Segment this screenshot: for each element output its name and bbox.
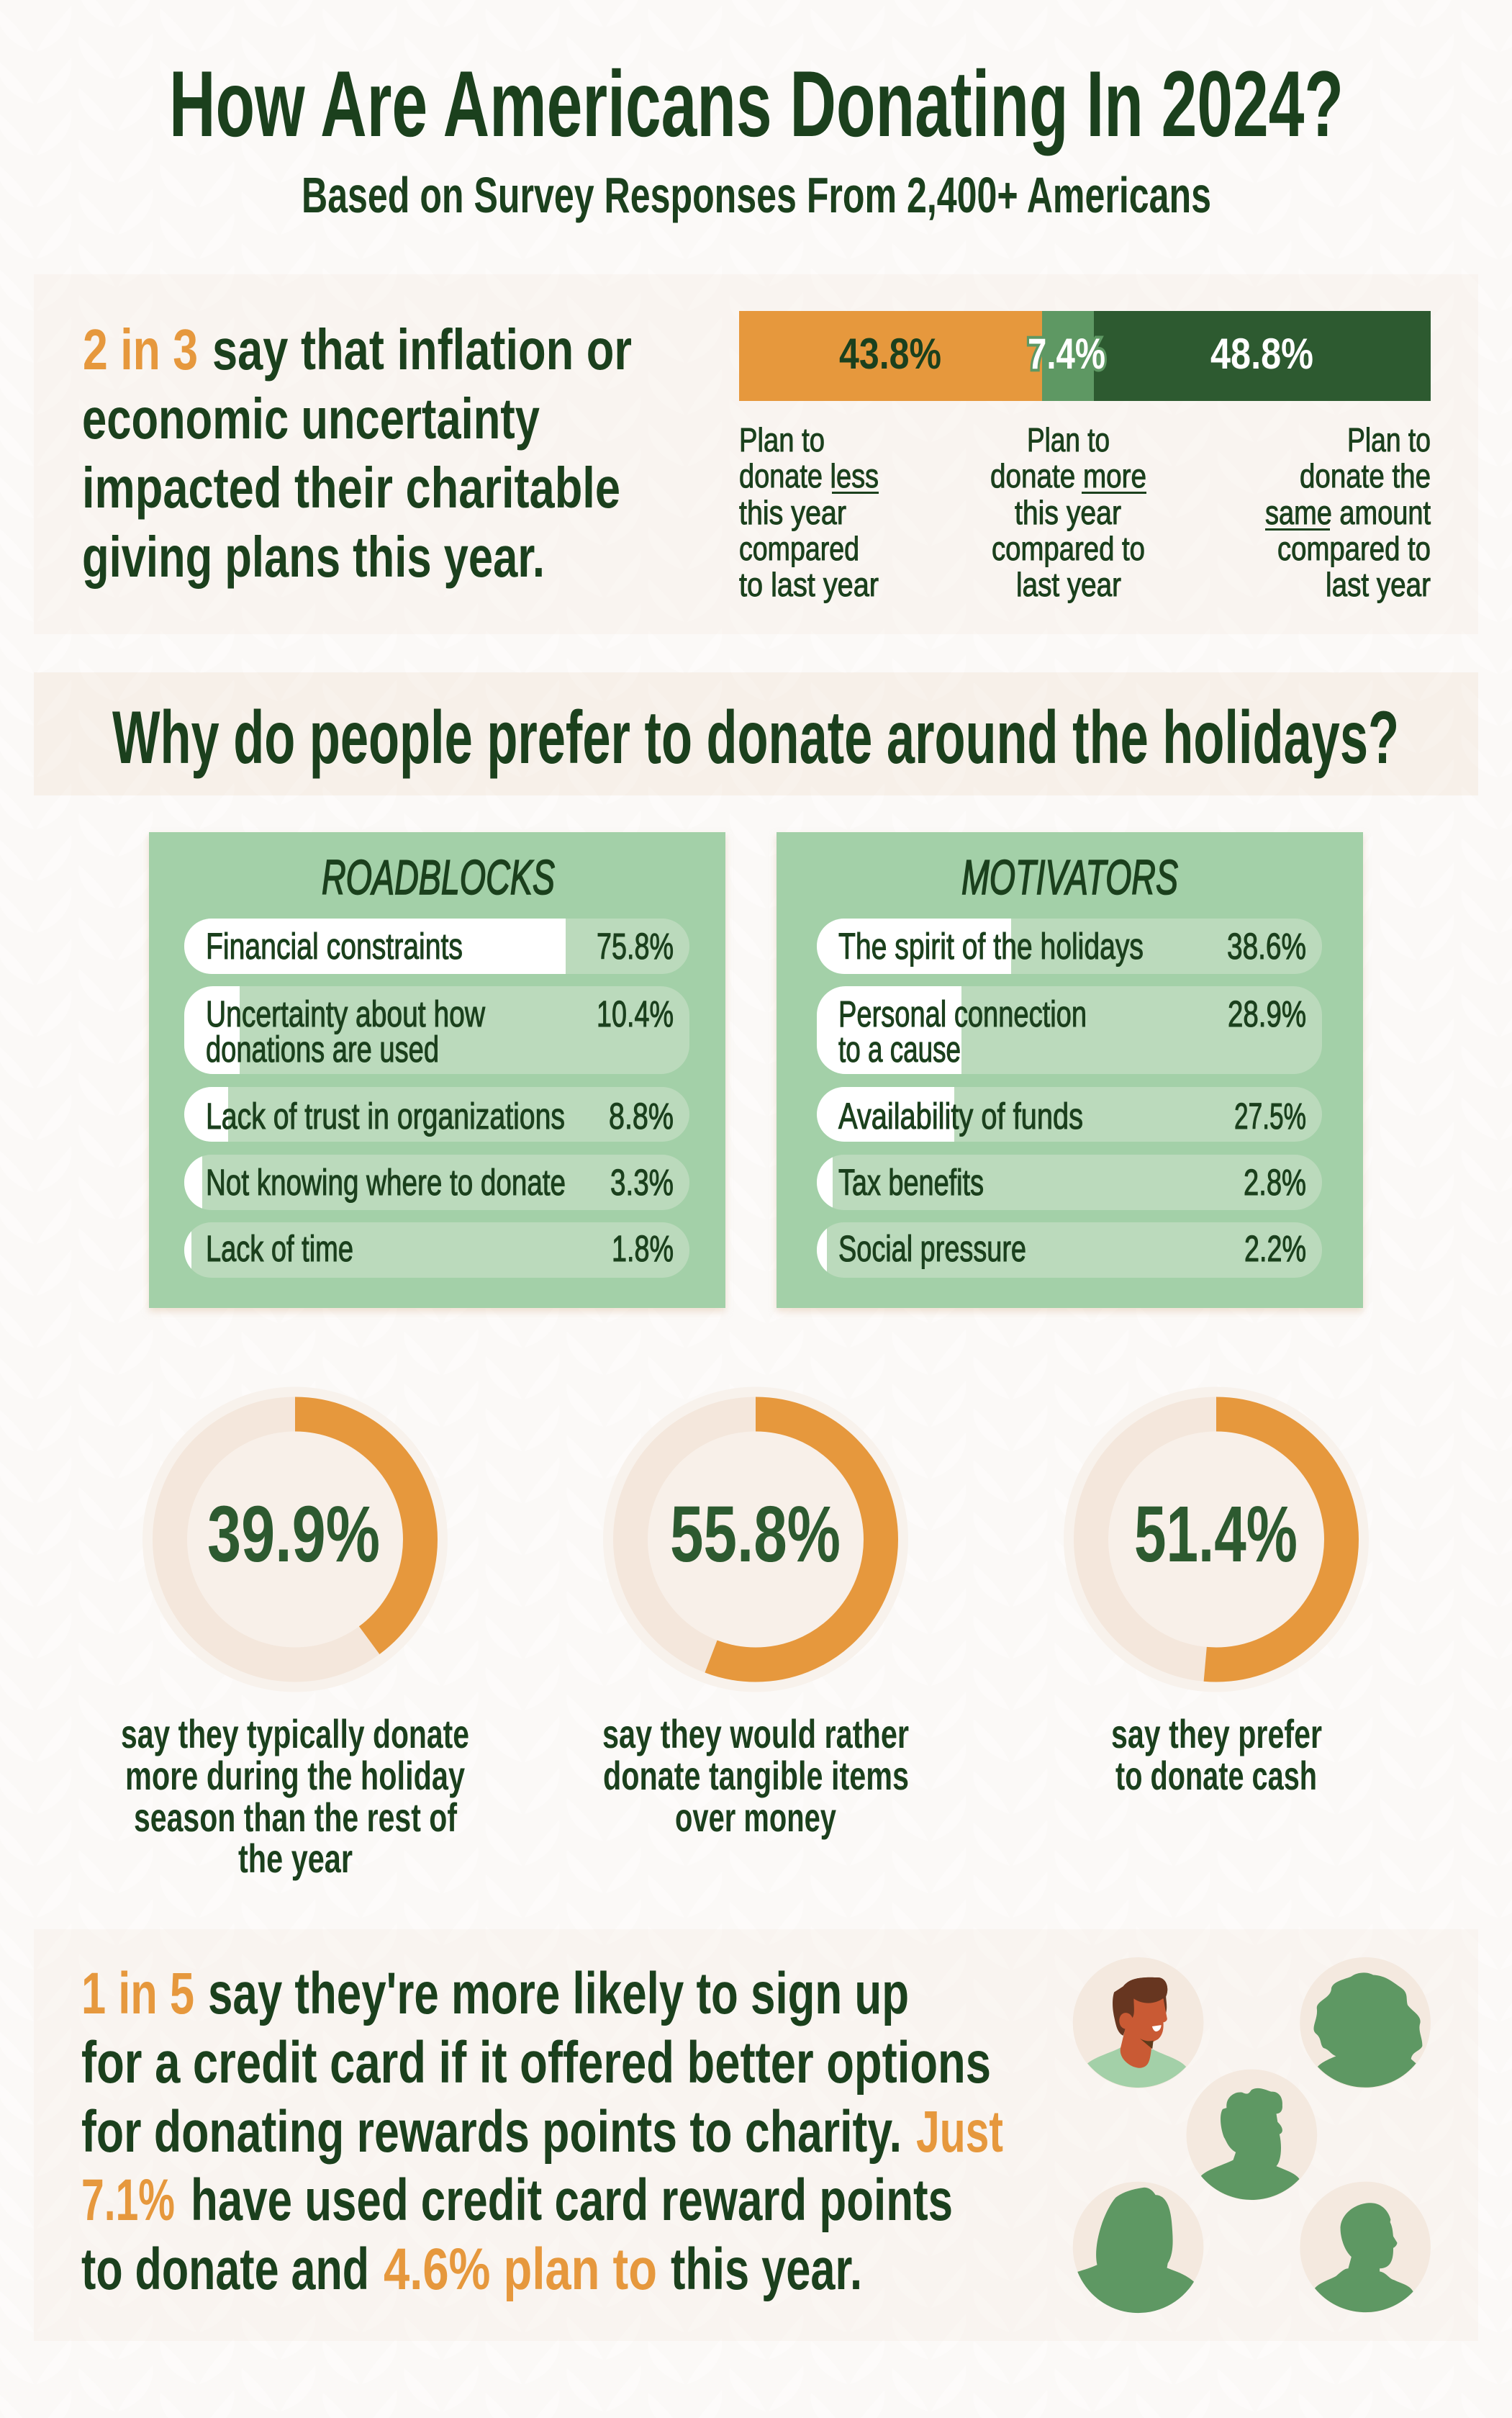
statement: 2 in 3: 2 in 3	[83, 317, 198, 382]
statement: 1 in 5: for a credit card if it offered better options	[81, 2030, 991, 2096]
row: lack of time: 1.8%	[612, 1228, 674, 1269]
donut: 39.9%: 39.9%	[207, 1490, 380, 1579]
row: lack of trust: Lack of trust in organizations	[206, 1096, 565, 1137]
bar caption: donate more: donate more	[990, 457, 1146, 495]
row: social pressure: 2.2%	[1244, 1228, 1306, 1269]
donut caption: 51.4%	[1111, 1711, 1322, 1798]
row: tax benefits	[817, 1155, 1322, 1210]
bar caption: donate more: this year	[1015, 494, 1121, 531]
donut: 55.8%	[603, 1386, 908, 1692]
bar caption: donate less: this year	[739, 494, 846, 531]
donut caption: 55.8%: over money	[675, 1795, 836, 1840]
statement: 1 in 5: have used credit card reward points	[191, 2167, 953, 2233]
statement: 1 in 5: to donate and	[81, 2237, 369, 2302]
statement: 1 in 5: for donating rewards points to charity.	[81, 2099, 902, 2165]
bar caption: donate more: compared to	[992, 530, 1145, 567]
stacked bar chart: 43.8%	[839, 330, 941, 378]
statement: 1 in 5	[81, 1961, 1003, 2302]
donut caption: 39.9%: more during the holiday	[125, 1753, 465, 1798]
icon: long hair silhouette	[1073, 2182, 1203, 2313]
row: availability of funds	[817, 1087, 1322, 1142]
statement: 1 in 5: 4.6% plan to	[384, 2237, 657, 2302]
donut: 55.8%: 55.8%	[670, 1490, 841, 1579]
row: uncertainty	[184, 986, 689, 1074]
bar caption: donate less: to last year	[739, 566, 879, 603]
statement: 2 in 3: impacted their charitable	[82, 456, 620, 520]
row: lack of time	[184, 1222, 689, 1278]
row: uncertainty: Uncertainty about how	[206, 993, 485, 1034]
icon: curly hair silhouette	[1300, 1957, 1431, 2088]
row: availability of funds: 27.5%	[1234, 1096, 1306, 1137]
bar caption: donate less	[739, 421, 879, 603]
bar caption: donate the same: last year	[1326, 566, 1431, 603]
statement: 2 in 3: say that inflation or	[212, 317, 632, 382]
icon: wavy hair silhouette	[1186, 2070, 1317, 2201]
row: financial constraints	[184, 919, 689, 974]
bar caption: donate more: Plan to	[1027, 421, 1110, 459]
statement: 2 in 3: economic uncertainty	[82, 387, 540, 451]
donut: 51.4%	[1064, 1386, 1369, 1692]
avatars	[1073, 1957, 1431, 2313]
statement: 1 in 5: Just	[916, 2099, 1003, 2165]
row: lack of trust: 8.8%	[609, 1096, 674, 1137]
row: financial constraints: 75.8%	[597, 926, 674, 967]
row: personal connection: to a cause	[838, 1029, 961, 1070]
row: uncertainty: 10.4%	[597, 993, 674, 1034]
donut caption: 55.8%	[602, 1711, 909, 1840]
donut caption: 39.9%: say they typically donate	[121, 1711, 469, 1756]
bar caption: donate the same	[1265, 421, 1431, 603]
row: tax benefits: Tax benefits	[838, 1162, 984, 1203]
bar caption: donate less: compared	[739, 530, 859, 567]
motivators heading: MOTIVATORS	[961, 850, 1178, 905]
donut caption: 39.9%: season than the rest of	[134, 1795, 457, 1840]
donut caption: 55.8%: donate tangible items	[603, 1753, 909, 1798]
stacked bar chart: 7.4%	[1028, 330, 1105, 378]
row: tax benefits: 2.8%	[1244, 1162, 1306, 1203]
bar caption: donate more: last year	[1016, 566, 1121, 603]
row: personal connection: Personal connection	[838, 993, 1087, 1034]
donut: 39.9%	[142, 1386, 448, 1692]
bar caption: donate less: Plan to	[739, 421, 825, 459]
bar caption: donate more	[990, 421, 1146, 603]
panel: credit card rewards	[81, 1957, 1431, 2313]
roadblocks heading: ROADBLOCKS	[322, 850, 555, 905]
row: spirit of holidays: The spirit of the holidays	[838, 926, 1144, 967]
statement: 1 in 5: 1 in 5	[81, 1961, 194, 2026]
row: social pressure	[817, 1222, 1322, 1278]
row: uncertainty: donations are used	[206, 1029, 439, 1070]
donut caption: 39.9%: the year	[238, 1836, 353, 1881]
row: availability of funds: Availability of funds	[838, 1096, 1083, 1137]
statement: 1 in 5: this year.	[671, 2237, 862, 2302]
icon: smiling man	[1073, 1957, 1203, 2088]
statement: 1 in 5: 7.1%	[81, 2167, 175, 2233]
donut: 51.4%: 51.4%	[1134, 1490, 1298, 1579]
statement: 2 in 3	[82, 317, 632, 589]
row: personal connection	[817, 986, 1322, 1074]
row: not knowing where: 3.3%	[610, 1162, 674, 1203]
row: spirit of holidays: 38.6%	[1227, 926, 1306, 967]
bar caption: donate the same: donate the	[1300, 457, 1431, 495]
panel: inflation impact	[82, 311, 1431, 603]
row: lack of time: Lack of time	[206, 1228, 353, 1269]
icon: short hair silhouette	[1300, 2182, 1431, 2313]
bar caption: donate the same: compared to	[1277, 530, 1431, 567]
stacked bar chart	[739, 311, 1431, 401]
donut caption: 51.4%: say they prefer	[1111, 1711, 1322, 1756]
bar caption: donate the same: Plan to	[1347, 421, 1431, 459]
statement: 2 in 3: giving plans this year.	[82, 525, 545, 589]
panel: roadblocks	[149, 832, 725, 1308]
statement: 1 in 5: say they're more likely to sign up	[208, 1961, 909, 2026]
donut caption: 55.8%: say they would rather	[602, 1711, 909, 1756]
bar caption: donate the same: same amount	[1265, 494, 1431, 531]
row: personal connection: 28.9%	[1228, 993, 1306, 1034]
panel: motivators	[777, 832, 1363, 1308]
row: lack of trust	[184, 1087, 689, 1142]
row: spirit of holidays	[817, 919, 1322, 974]
bar caption: donate less: donate less	[739, 457, 879, 495]
row: financial constraints: Financial constraints	[206, 926, 463, 967]
donut caption: 51.4%: to donate cash	[1115, 1753, 1317, 1798]
row: not knowing where	[184, 1155, 689, 1210]
donut caption: 39.9%	[121, 1711, 469, 1881]
row: social pressure: Social pressure	[838, 1228, 1026, 1269]
stacked bar chart: 48.8%	[1210, 330, 1313, 378]
row: not knowing where: Not knowing where to donate	[206, 1162, 566, 1203]
